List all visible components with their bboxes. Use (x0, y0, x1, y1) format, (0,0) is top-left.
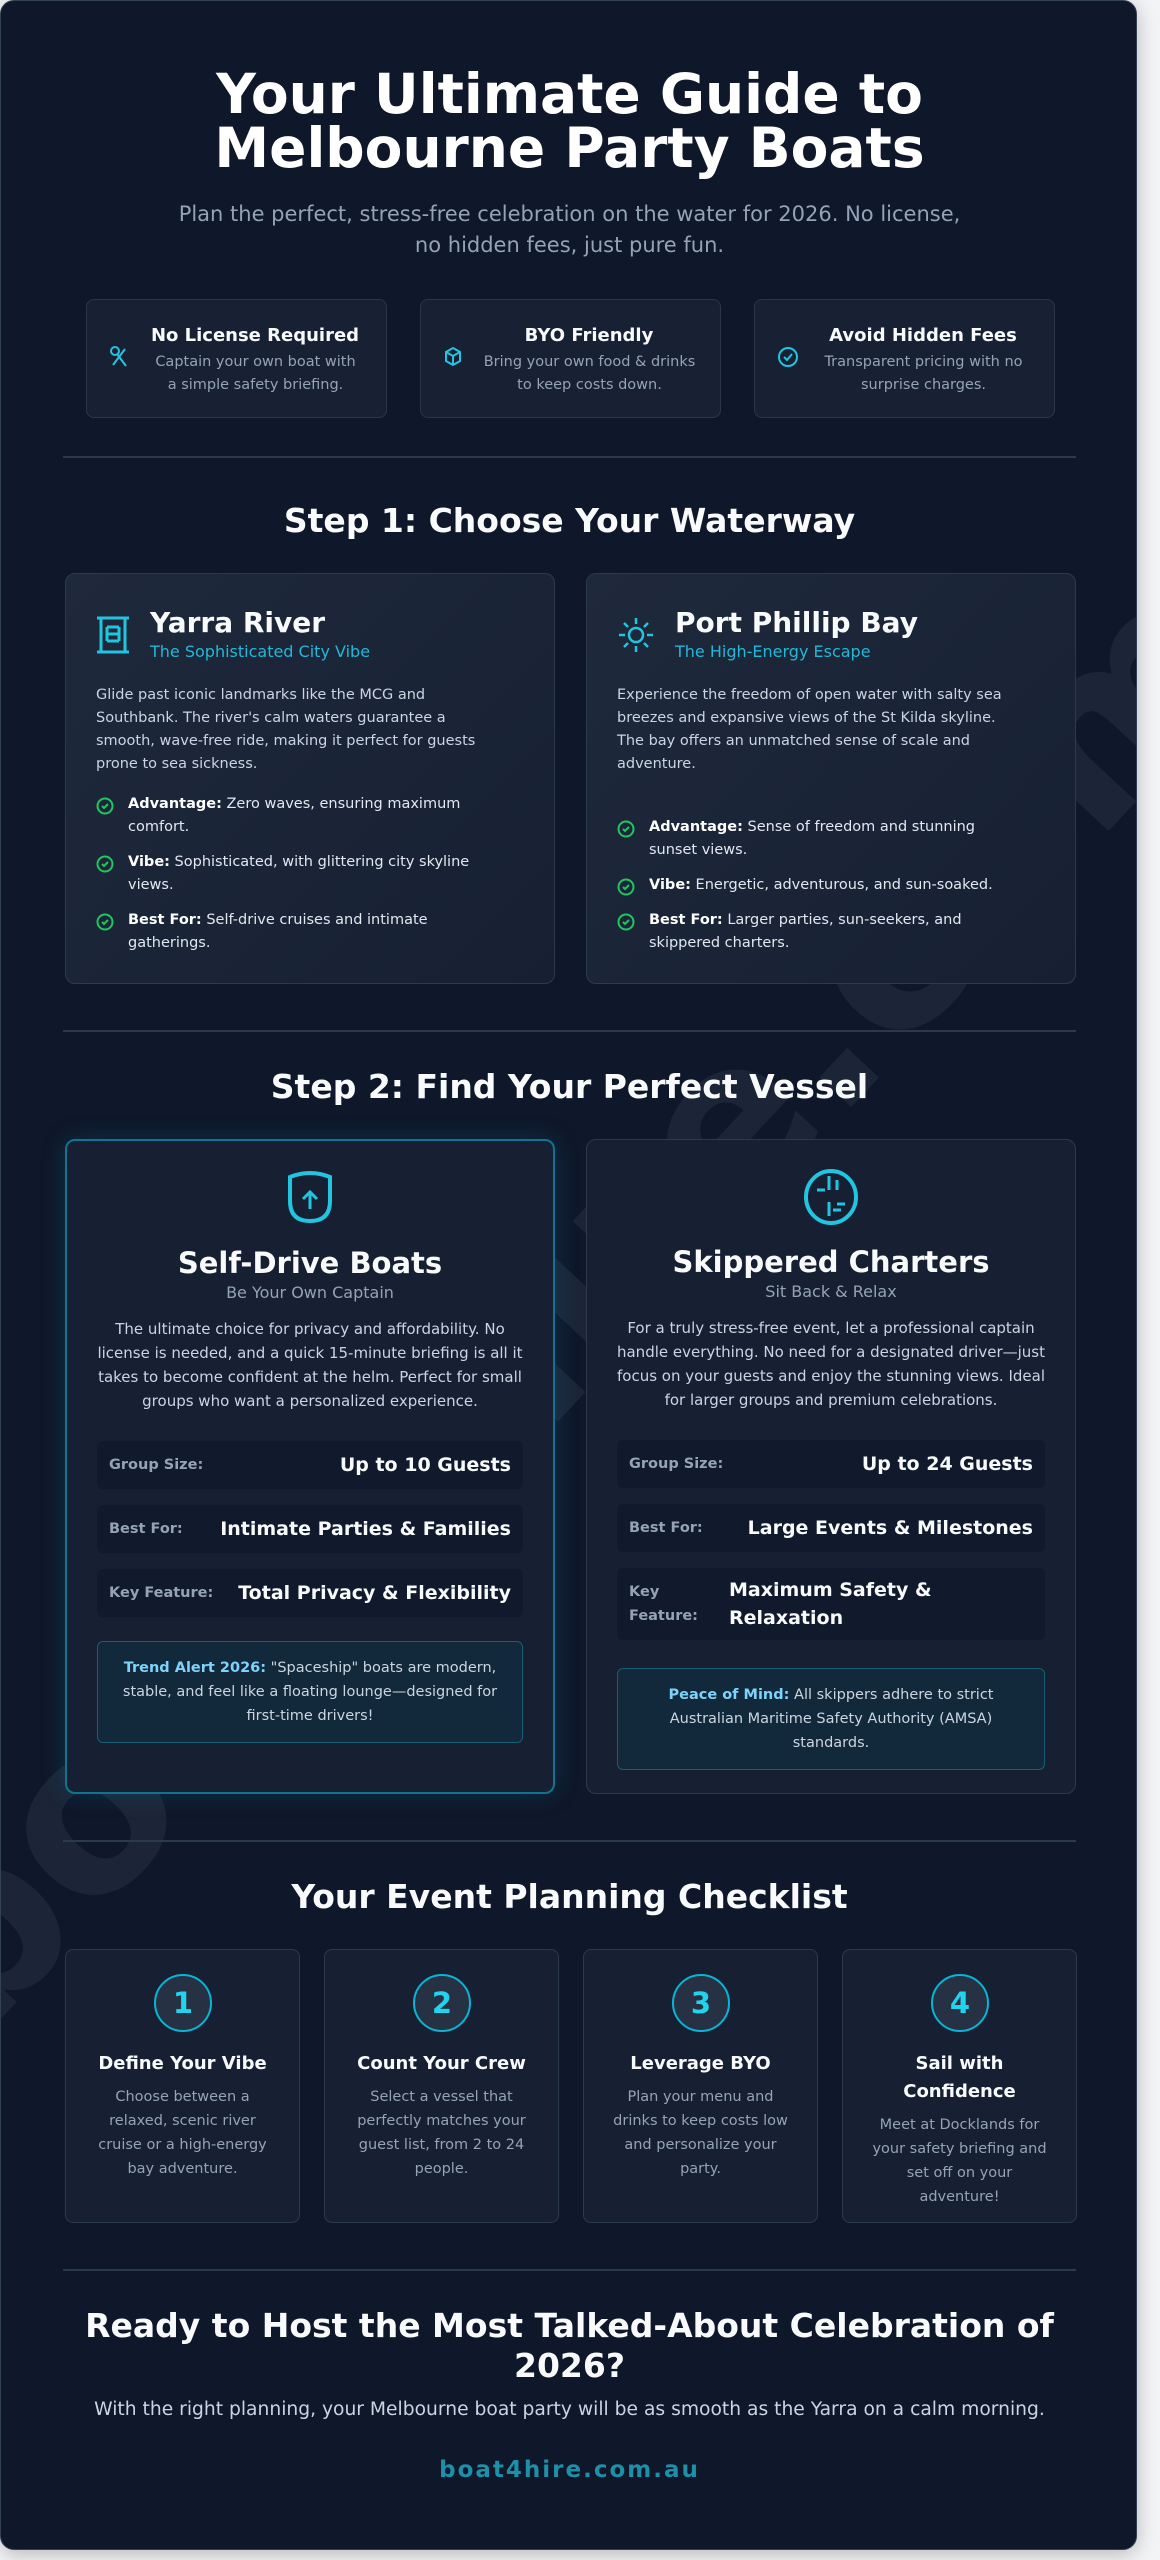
panel: yarra river: Vibe: Sophisticated, with glittering city skyline views. (128, 854, 469, 893)
icon: cube (445, 346, 461, 366)
panel: self-drive boats: The ultimate choice for privacy and affordability. No license is needed, and a quick 15-minute briefing is all it takes to become confident at the helm. Perfect for small groups who want a personalized experience. (97, 1320, 523, 1410)
panel: skippered charters: Up to 24 Guests (862, 1453, 1033, 1475)
panel: self-drive boats: Trend Alert 2026: "Spaceship" boats are modern, stable, and feel like a floating lounge—designed for first-time drivers! (123, 1660, 497, 1724)
panel: self-drive boats: Group Size: (109, 1457, 203, 1473)
cta heading: Ready to Host the Most Talked-About Celebration of 2026? (85, 2306, 1054, 2385)
feature: hidden fees: Avoid Hidden Fees (829, 325, 1017, 346)
panel: self-drive boats: Be Your Own Captain (226, 1283, 394, 1302)
panel: port phillip bay (586, 573, 1076, 984)
feature: hidden fees: Transparent pricing with no surprise charges. (824, 354, 1023, 393)
panel: port phillip bay: Experience the freedom of open water with salty sea breezes and expansive views of the St Kilda skyline. The bay offers an unmatched sense of scale and adventure. (617, 687, 1002, 772)
panel: skippered charters: Peace of Mind: All skippers adhere to strict Australian Maritime Safety Authority (AMSA) standards. (668, 1687, 994, 1751)
icon: boat up (288, 1171, 332, 1223)
step card 2: Select a vessel that perfectly matches your guest list, from 2 to 24 people. (357, 2089, 526, 2177)
cta text: With the right planning, your Melbourne boat party will be as smooth as the Yarra on a calm morning. (94, 2399, 1045, 2420)
panel: port phillip bay: Port Phillip Bay (675, 606, 918, 639)
panel: skippered charters: Group Size: (629, 1456, 723, 1472)
panel: self-drive boats (65, 1139, 555, 1794)
step card 3: Plan your menu and drinks to keep costs low and personalize your party. (613, 2089, 788, 2177)
panel: skippered charters: Sit Back & Relax (765, 1282, 897, 1301)
step card 4: Meet at Docklands for your safety briefing and set off on your adventure! (872, 2117, 1047, 2205)
step card 2: Count Your Crew (357, 2053, 526, 2074)
panel: skippered charters (586, 1139, 1076, 1794)
panel: yarra river: Best For: Self-drive cruises and intimate gatherings. (128, 912, 428, 951)
panel: port phillip bay: The High-Energy Escape (675, 642, 871, 661)
icon: sun (619, 618, 653, 652)
panel: port phillip bay: Vibe: Energetic, adventurous, and sun-soaked. (649, 877, 993, 893)
panel: port phillip bay: Best For: Larger parties, sun-seekers, and skippered charters. (649, 912, 962, 951)
icon: check circle (778, 347, 798, 367)
step card 4: Sail with Confidence (903, 2053, 1016, 2102)
step card 1: Define Your Vibe (98, 2053, 267, 2074)
panel: yarra river: Glide past iconic landmarks like the MCG and Southbank. The river's calm waters guarantee a smooth, wave-free ride, making it perfect for guests prone to sea sickness. (96, 687, 475, 772)
icon: wheel (804, 1169, 858, 1225)
step card 3: Leverage BYO (630, 2053, 771, 2074)
step card 2: 2 (432, 1986, 452, 2020)
panel: self-drive boats: Self-Drive Boats (178, 1246, 442, 1280)
step card 4: 4 (950, 1986, 970, 2020)
panel: skippered charters: For a truly stress-free event, let a professional captain handle everything. No need for a designated driver—just focus on your guests and enjoy the stunning views. Ideal for larger groups and premium celebrations. (617, 1319, 1045, 1409)
panel: self-drive boats: Up to 10 Guests (340, 1454, 511, 1476)
panel: port phillip bay: Advantage: Sense of freedom and stunning sunset views. (649, 819, 975, 858)
step card 3: 3 (691, 1986, 711, 2020)
panel: skippered charters: Large Events & Milestones (748, 1517, 1033, 1539)
title: Melbourne Party Boats (214, 116, 925, 180)
feature: no license: Captain your own boat with a simple safety briefing. (155, 354, 356, 393)
panel: yarra river: The Sophisticated City Vibe (150, 642, 370, 661)
feature: byo: Bring your own food & drinks to keep costs down. (484, 354, 695, 393)
step card 4 (842, 1949, 1077, 2223)
title: Your Ultimate Guide to (216, 62, 923, 126)
step card 1: 1 (173, 1986, 193, 2020)
panel: skippered charters: Key Feature: (629, 1584, 698, 1624)
panel: skippered charters: Best For: (629, 1520, 703, 1536)
step card 2 (324, 1949, 559, 2223)
panel: self-drive boats: Key Feature: (109, 1585, 213, 1601)
checklist heading: Your Event Planning Checklist (291, 1877, 848, 1916)
feature: no license: No License Required (151, 325, 359, 346)
step card 1: Choose between a relaxed, scenic river cruise or a high-energy bay adventure. (98, 2089, 267, 2177)
panel: skippered charters: Maximum Safety & Relaxation (729, 1579, 932, 1629)
step 2 heading: Step 2: Find Your Perfect Vessel (271, 1067, 868, 1106)
panel: self-drive boats: Total Privacy & Flexibility (238, 1582, 511, 1604)
icon: building (97, 616, 129, 654)
panel: skippered charters: Skippered Charters (672, 1245, 990, 1279)
panel: yarra river (65, 573, 555, 984)
subtitle (179, 202, 960, 257)
feature: hidden fees (754, 299, 1055, 418)
panel: self-drive boats: Intimate Parties & Families (220, 1518, 511, 1540)
url: boat4hire.com.au (439, 2457, 700, 2483)
title (214, 62, 925, 180)
step card 1 (65, 1949, 300, 2223)
subtitle: Plan the perfect, stress-free celebration on the water for 2026. No license, (179, 202, 960, 226)
feature: byo: BYO Friendly (525, 325, 653, 346)
step 1 heading: Step 1: Choose Your Waterway (284, 501, 855, 540)
icon: wrench (110, 346, 127, 367)
subtitle: no hidden fees, just pure fun. (415, 233, 724, 257)
step card 3 (583, 1949, 818, 2223)
panel: yarra river: Yarra River (150, 606, 325, 639)
panel: self-drive boats: Best For: (109, 1521, 183, 1537)
feature: byo (420, 299, 721, 418)
panel: yarra river: Advantage: Zero waves, ensuring maximum comfort. (128, 796, 460, 835)
feature: no license (86, 299, 387, 418)
